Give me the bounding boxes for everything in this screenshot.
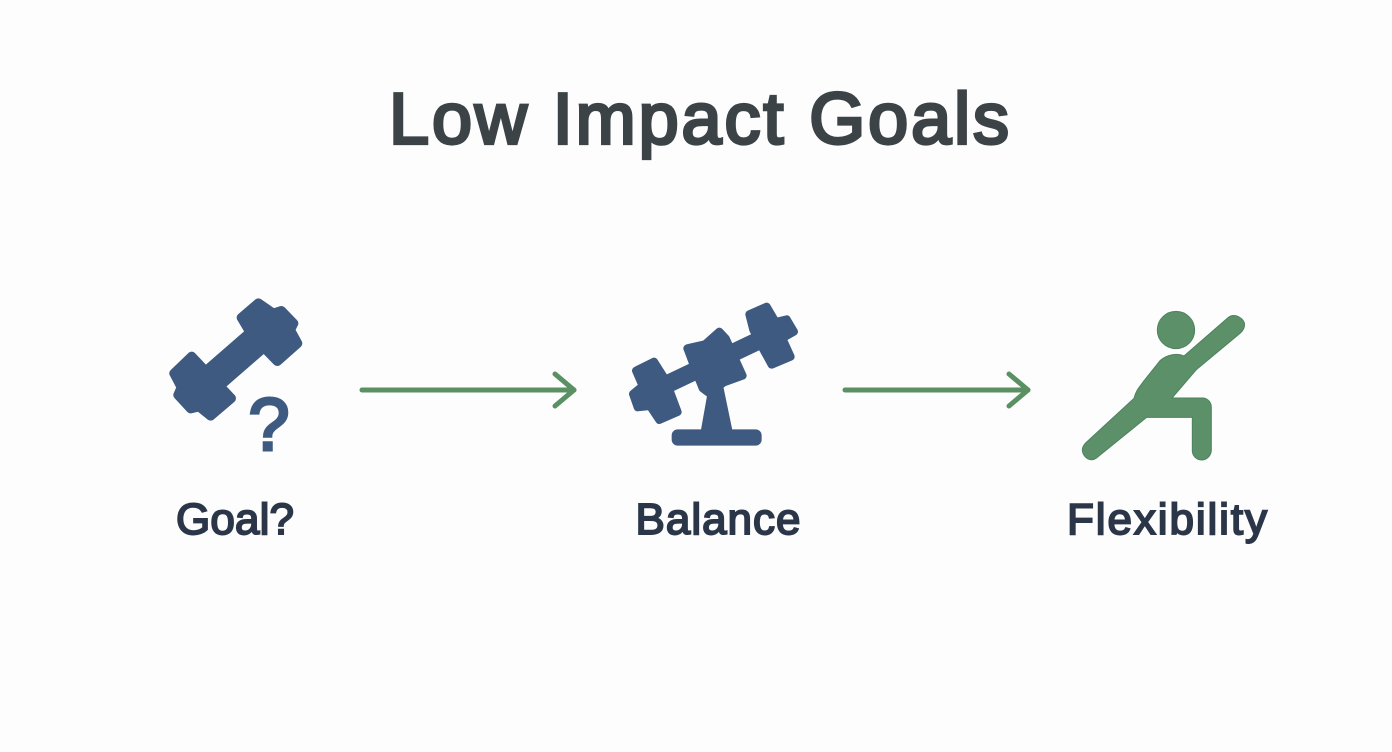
bar — [660, 338, 763, 388]
right plates — [749, 307, 794, 365]
arrow: balance to flexibility — [845, 374, 1028, 406]
icon: stretching figure — [1082, 311, 1245, 460]
body and limbs — [1082, 316, 1245, 460]
title: Low Impact Goals — [389, 80, 1009, 160]
head — [1157, 311, 1195, 349]
stand — [701, 383, 733, 432]
arrow: goal to balance — [362, 374, 574, 406]
label: Balance: Balance — [636, 495, 800, 544]
icon: dumbbell with question mark — [174, 303, 298, 466]
icon: tilted dumbbell — [174, 303, 298, 416]
icon: balanced dumbbell on stand — [633, 307, 794, 442]
label: Flexibility: Flexibility — [1067, 495, 1267, 544]
label: Goal?: Goal? — [176, 495, 294, 544]
centre block — [687, 332, 743, 393]
left plates — [633, 362, 678, 420]
icon: question mark: ? — [248, 383, 290, 466]
